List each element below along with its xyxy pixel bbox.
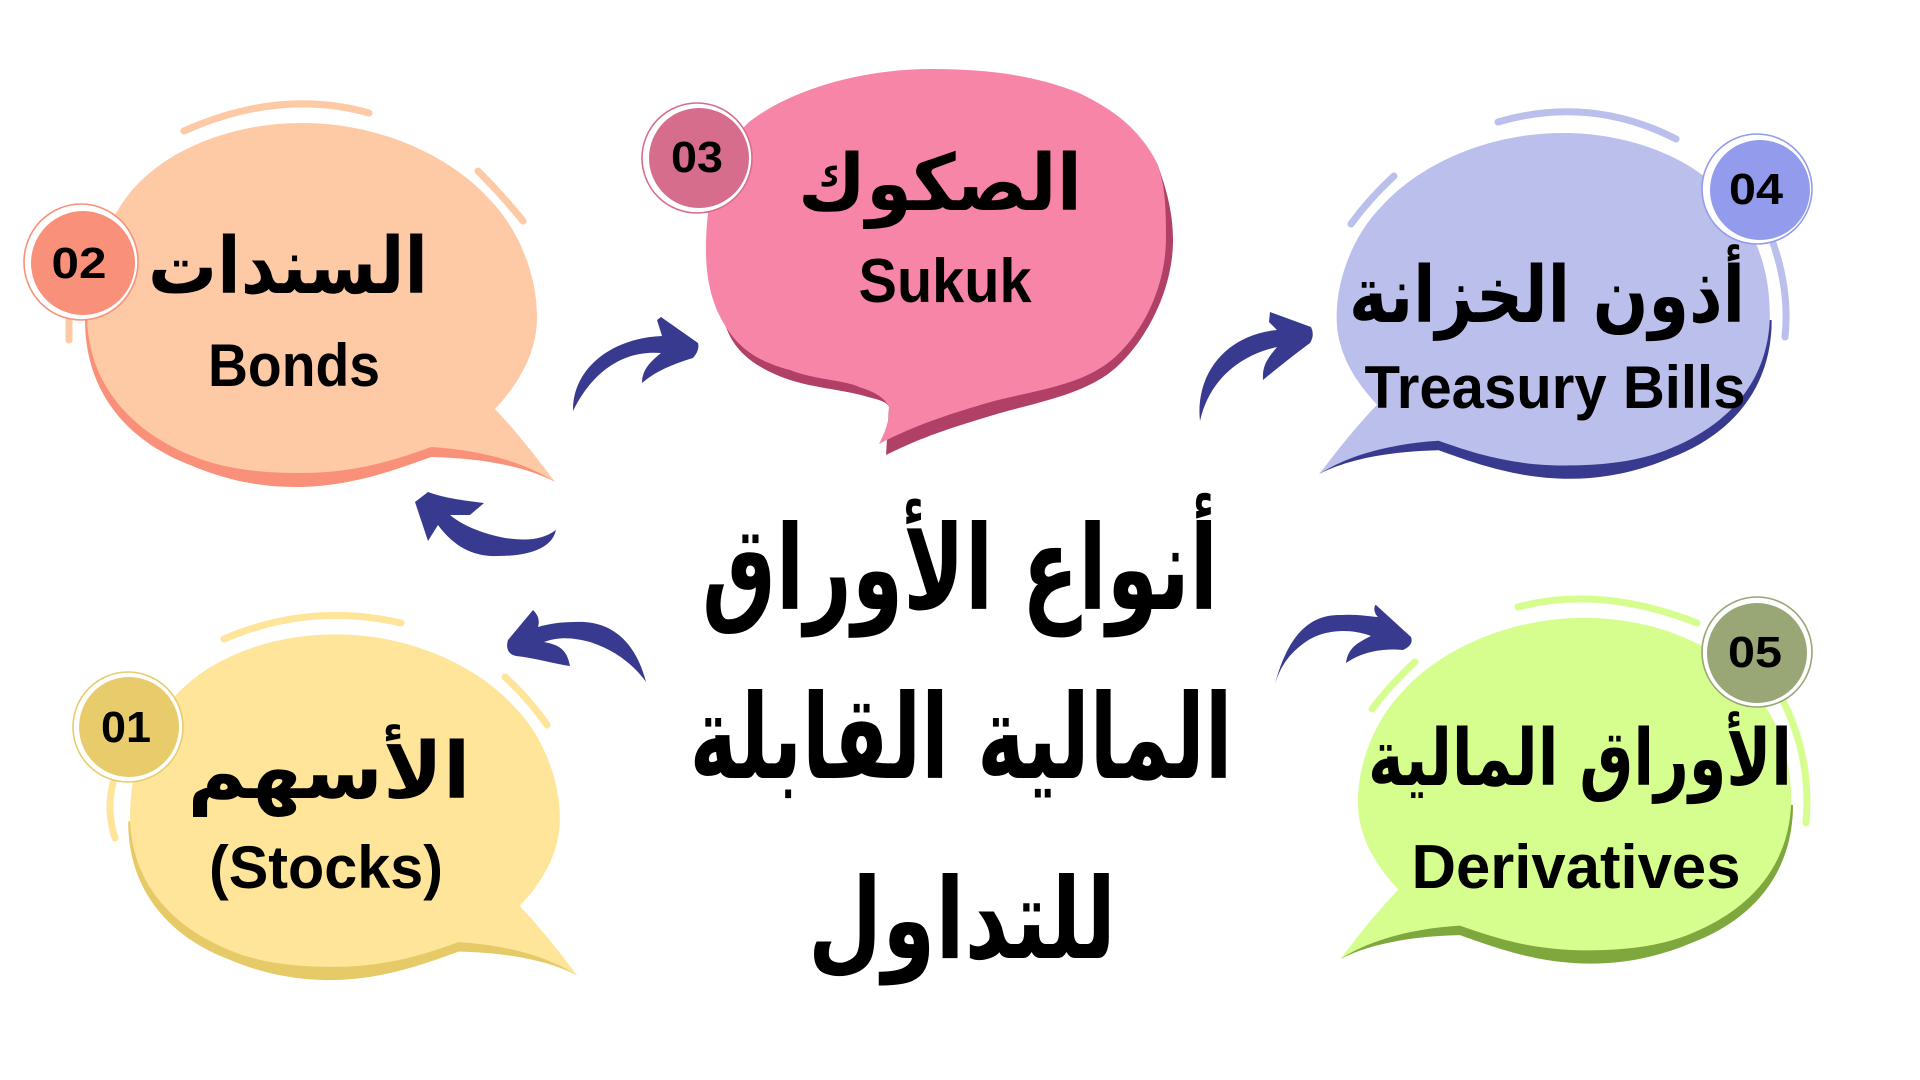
panel: 05 derivatives bbox=[1341, 597, 1812, 964]
speech bubble: stocks bbox=[128, 634, 577, 980]
number badge: 04 bbox=[1702, 134, 1812, 244]
title: المالية القابلة bbox=[690, 669, 1232, 806]
english label: derivatives: Derivatives bbox=[1412, 833, 1740, 902]
english label: stocks: (Stocks) bbox=[209, 834, 443, 901]
arabic heading: derivatives: الأوراق المالية bbox=[1368, 712, 1792, 804]
speech bubble: bonds bbox=[85, 123, 555, 487]
english label: sukuk: Sukuk bbox=[858, 247, 1032, 316]
arrow: bonds to sukuk bbox=[573, 317, 698, 411]
arabic heading: stocks: الأسهم bbox=[188, 725, 470, 817]
speech bubble: derivatives bbox=[1341, 618, 1793, 964]
number badge: 05: 05 bbox=[1728, 628, 1782, 677]
number badge: 01 bbox=[73, 672, 183, 782]
arrow: title to bonds bbox=[415, 492, 556, 556]
speech bubble: treasury bbox=[1319, 133, 1772, 479]
number badge: 05 bbox=[1702, 597, 1812, 707]
panel: 04 treasury bills bbox=[1319, 112, 1812, 479]
title: أنواع الأوراق bbox=[702, 492, 1218, 638]
number badge: 04: 04 bbox=[1729, 165, 1784, 214]
panel: 01 stocks bbox=[73, 615, 577, 980]
decorative arcs: bonds bbox=[69, 104, 523, 340]
title: للتداول bbox=[808, 855, 1116, 986]
number badge: 02: 02 bbox=[52, 239, 106, 288]
english label: treasury: Treasury Bills bbox=[1364, 354, 1746, 421]
decorative arcs: stocks bbox=[110, 615, 547, 838]
arabic heading: sukuk: الصكوك bbox=[798, 139, 1082, 229]
panel: 02 bonds bbox=[24, 104, 555, 487]
arabic heading: treasury: أذون الخزانة bbox=[1349, 244, 1745, 341]
english label: bonds: Bonds bbox=[208, 332, 380, 399]
number badge: 02 bbox=[24, 204, 138, 320]
number badge: 03: 03 bbox=[671, 133, 723, 182]
title bbox=[690, 492, 1232, 986]
number badge: 03 bbox=[642, 103, 752, 213]
decorative arcs: derivatives bbox=[1372, 599, 1807, 823]
arrow: title to derivatives bbox=[1275, 605, 1412, 684]
number badge: 01: 01 bbox=[101, 703, 151, 752]
panel: 03 sukuk bbox=[642, 69, 1173, 455]
arabic heading: bonds: السندات bbox=[148, 222, 428, 312]
arrow: title to stocks bbox=[507, 610, 646, 682]
speech bubble: sukuk bbox=[706, 69, 1173, 455]
decorative arcs: treasury bbox=[1351, 112, 1786, 337]
arrow: sukuk to treasury bbox=[1199, 312, 1313, 421]
